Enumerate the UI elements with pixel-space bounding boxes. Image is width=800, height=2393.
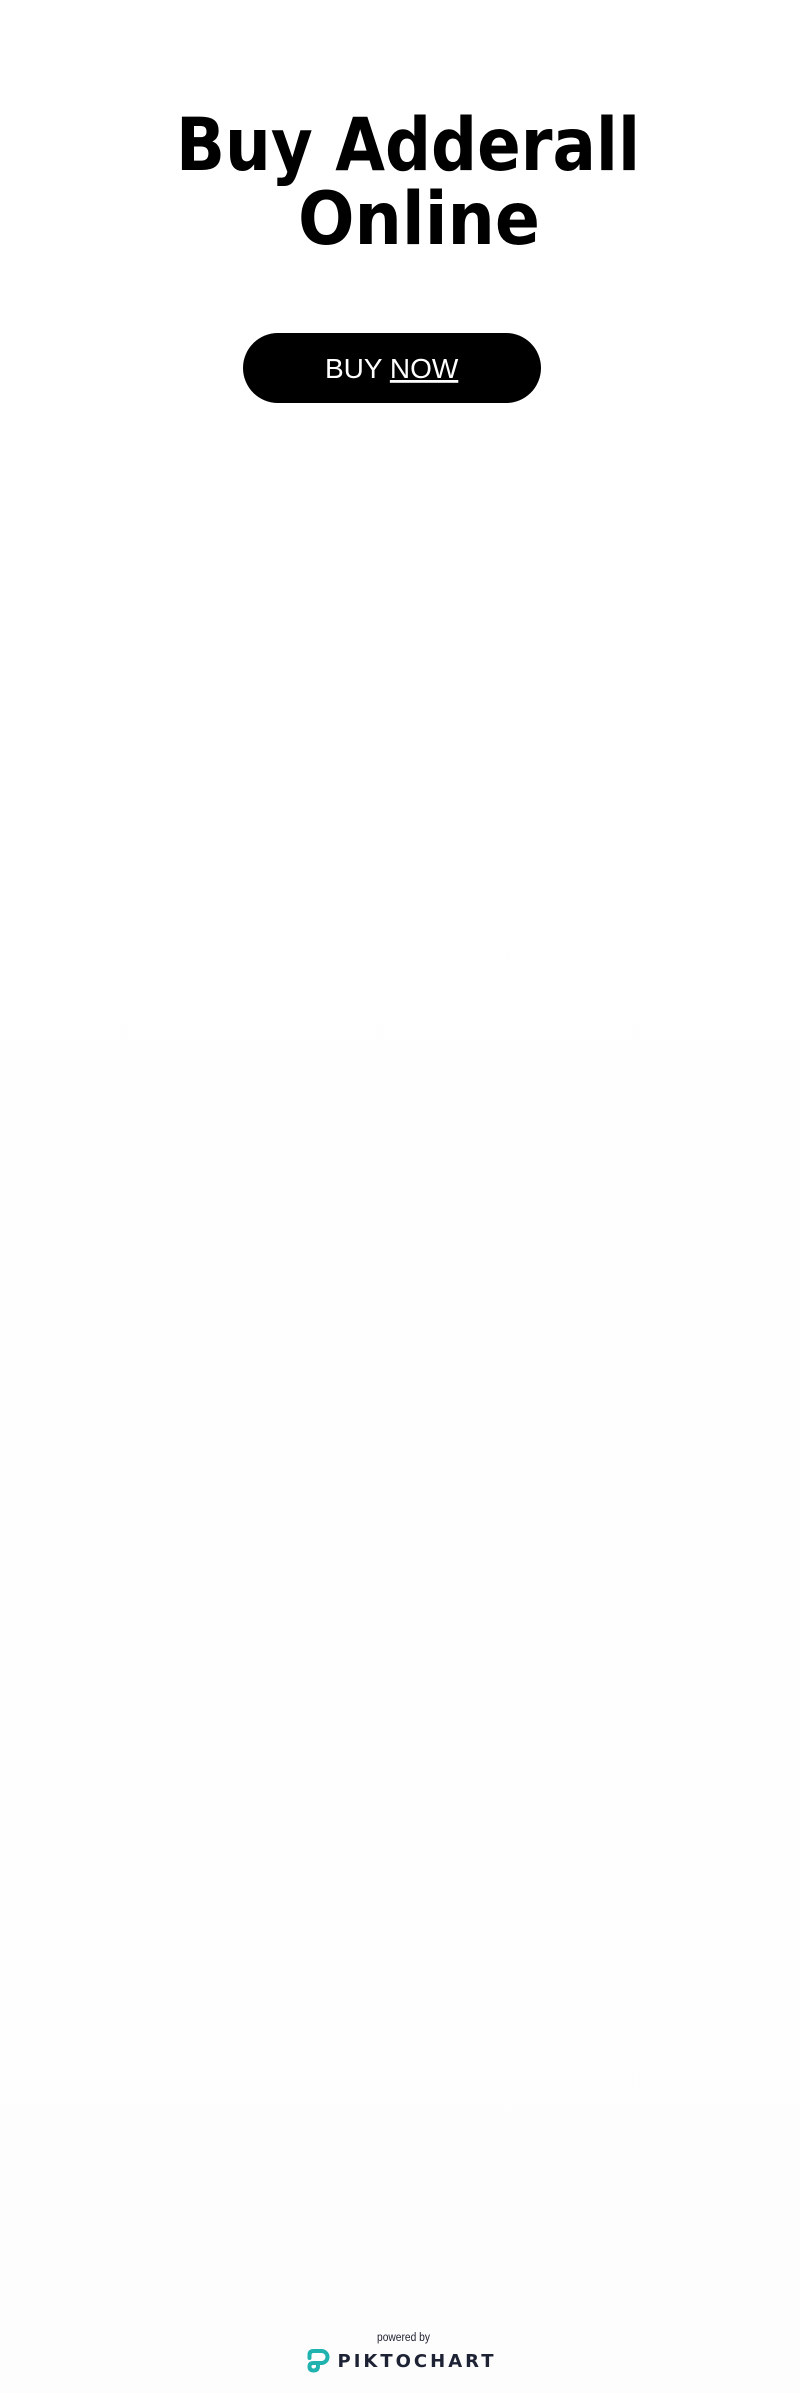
icon: piktochart logo [310, 2351, 328, 2370]
title: Online [298, 177, 540, 262]
footer: powered by piktochart [310, 2332, 494, 2372]
button: buy now [243, 333, 541, 403]
piktochart wordmark: PIKTOCHART [338, 2351, 494, 2372]
button: buy now: BUY NOW [325, 353, 459, 384]
title: Buy Adderall [176, 103, 640, 188]
title [176, 103, 640, 262]
powered by label: powered by [377, 2332, 430, 2344]
